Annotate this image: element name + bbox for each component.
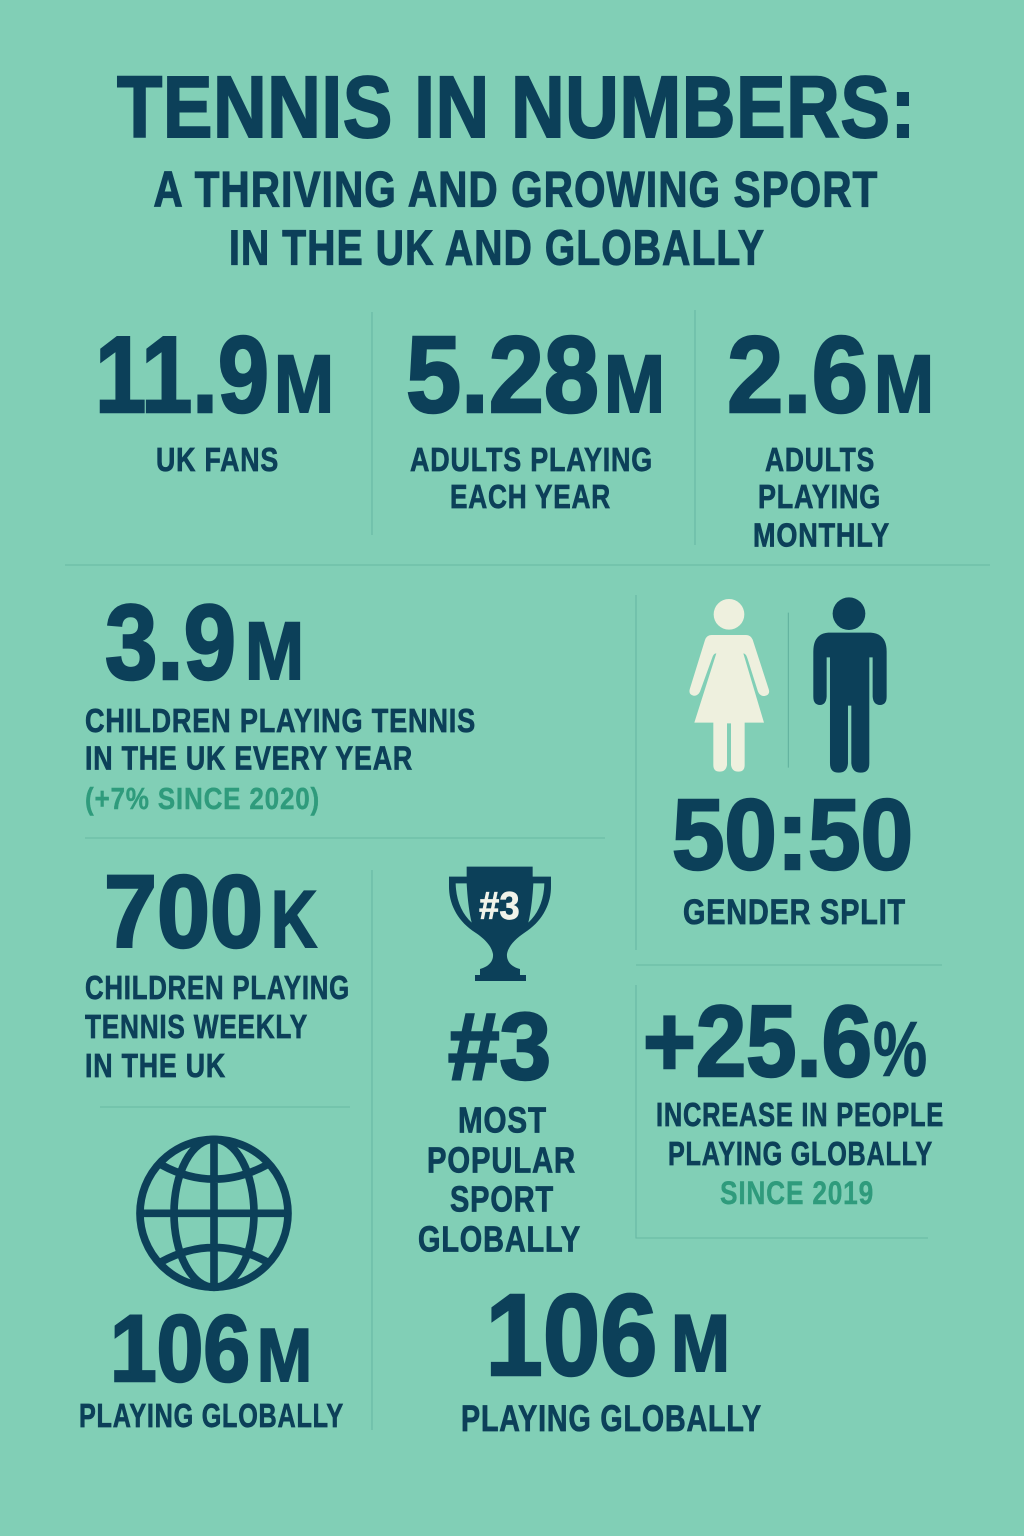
stat: adults playing monthly: MONTHLY (753, 516, 890, 554)
stat: adults playing each year: ADULTS PLAYING (410, 441, 653, 478)
stat: most popular sport: #3 (448, 994, 551, 1100)
stat: playing globally right: PLAYING GLOBALLY (461, 1398, 762, 1439)
stat: global increase: PLAYING GLOBALLY (668, 1135, 933, 1172)
stat: adults playing monthly: PLAYING (758, 478, 881, 515)
stat: children playing weekly: 700 (104, 854, 263, 969)
stat: playing globally left: 106 (110, 1296, 250, 1402)
stat: adults playing monthly: M (874, 339, 934, 430)
icon: trophy: #3 (479, 885, 520, 928)
stat: adults playing monthly: ADULTS (765, 441, 875, 478)
stat: global increase: SINCE 2019 (720, 1175, 874, 1211)
stat: global increase: +25.6 (643, 986, 872, 1098)
subtitle: IN THE UK AND GLOBALLY (229, 222, 765, 276)
stat: UK fans: M (274, 339, 334, 430)
stat: adults playing monthly: 2.6 (727, 314, 868, 436)
stat: children playing weekly: K (271, 875, 317, 965)
stat: adults playing each year (406, 314, 665, 515)
stat: playing globally right: 106 (486, 1270, 658, 1400)
stat: playing globally left: M (257, 1313, 312, 1397)
stat: most popular sport: POPULAR (427, 1140, 576, 1180)
stat: global increase: INCREASE IN PEOPLE (656, 1096, 944, 1133)
icon: trophy (449, 867, 551, 981)
stat: children playing every year (85, 582, 476, 816)
stat: children playing every year: M (245, 606, 304, 697)
stat: playing globally left (79, 1296, 344, 1434)
stat: UK fans: UK FANS (156, 441, 279, 478)
icon: woman and man figures (689, 597, 887, 773)
divider between figures (787, 613, 790, 768)
stat: children playing weekly: CHILDREN PLAYING (85, 969, 350, 1006)
stat: UK fans: 11.9 (95, 314, 269, 436)
stat: gender split: GENDER SPLIT (683, 893, 906, 932)
icon: globe (140, 1139, 288, 1287)
stat: playing globally right (461, 1270, 762, 1439)
stat: children playing weekly: TENNIS WEEKLY (85, 1008, 308, 1045)
stat: playing globally right: M (671, 1299, 730, 1389)
stat: playing globally left: PLAYING GLOBALLY (79, 1397, 344, 1434)
stat: global increase (643, 986, 944, 1211)
stat: children playing every year: CHILDREN PLAYING TENNIS (85, 702, 476, 739)
icon: woman (689, 599, 769, 772)
stat: adults playing each year: EACH YEAR (450, 478, 611, 515)
subtitle (154, 162, 878, 276)
stat: UK fans (95, 314, 334, 478)
stat: children playing every year: (+7% SINCE 2020) (85, 781, 320, 816)
stat: children playing every year: IN THE UK EVERY YEAR (85, 740, 413, 776)
icon: man (813, 597, 887, 773)
stat: most popular sport (418, 994, 581, 1260)
stat: most popular sport: GLOBALLY (418, 1218, 581, 1260)
stat: children playing weekly: IN THE UK (85, 1047, 226, 1084)
stat: children playing weekly (85, 854, 350, 1084)
stat: most popular sport: SPORT (450, 1178, 554, 1220)
stat: adults playing monthly (727, 314, 934, 554)
stat: adults playing each year: 5.28 (406, 314, 599, 436)
stat: adults playing each year: M (604, 339, 665, 430)
stat: global increase: % (873, 1005, 929, 1093)
stat: most popular sport: MOST (458, 1100, 547, 1140)
stat: gender split: 50:50 (672, 779, 913, 891)
stat: children playing every year: 3.9 (105, 582, 236, 702)
